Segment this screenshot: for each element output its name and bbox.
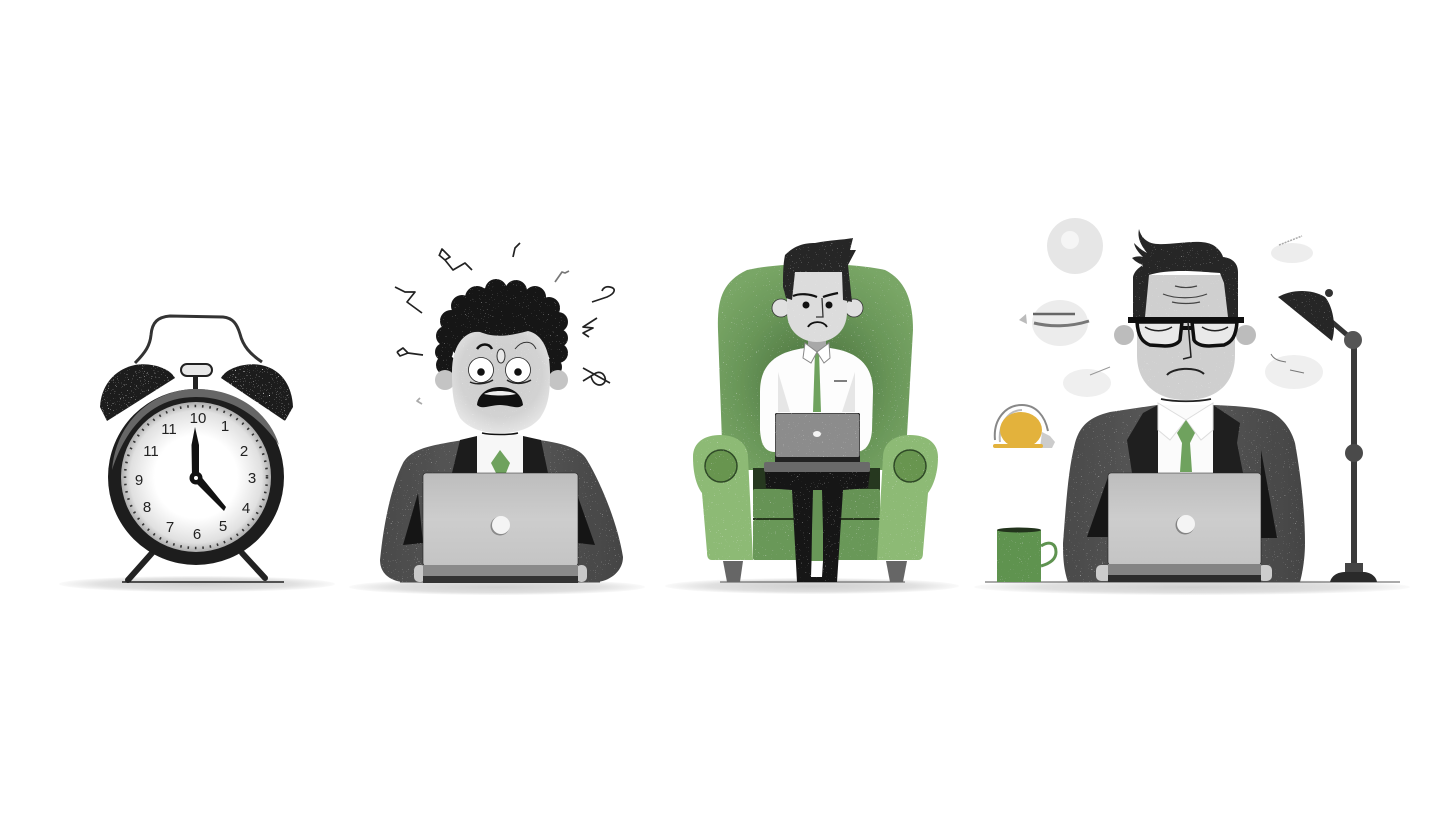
icon: gold coin [993, 405, 1055, 448]
hands [414, 565, 587, 582]
laptop [1108, 473, 1261, 582]
trousers [765, 472, 870, 582]
seat shadow [753, 468, 880, 492]
right bell [221, 364, 293, 421]
suit body [380, 438, 623, 582]
shirt shading [778, 372, 855, 412]
eyes and expression [468, 342, 536, 434]
clock handle [135, 316, 262, 363]
thought blob: lower left [1063, 367, 1111, 397]
thought: plate [1047, 218, 1103, 274]
shirt [760, 348, 873, 452]
seat cushions [753, 489, 880, 560]
chair legs [723, 561, 907, 582]
clock numbers: 10 [190, 410, 206, 427]
neck shadow [1161, 399, 1211, 401]
gap between legs [812, 490, 823, 530]
minute ticks [125, 406, 267, 548]
closed eyes [1145, 327, 1228, 331]
left bell [100, 364, 175, 421]
face [452, 331, 550, 433]
arm shadows [1087, 450, 1277, 538]
icon: mug [997, 528, 1056, 582]
chair arm right [877, 435, 938, 560]
shirt [1158, 405, 1213, 473]
clock numbers [135, 410, 256, 543]
clock numbers: 1 [221, 418, 229, 435]
icon: desk lamp [1278, 289, 1377, 582]
panel: alarm clock [59, 316, 335, 592]
shirt collar [477, 433, 523, 473]
laptop [775, 413, 860, 458]
wrinkles [1163, 286, 1207, 304]
panel: exhausted worker at desk [974, 218, 1410, 595]
head [787, 272, 847, 342]
stress squiggles [395, 243, 614, 404]
ground shadow [665, 578, 959, 594]
hair [783, 238, 856, 302]
panel: worker in armchair [665, 238, 959, 594]
lap table [764, 457, 870, 472]
bell hammer knob [181, 364, 212, 389]
collar [1158, 403, 1213, 440]
ground shadow [349, 579, 645, 595]
ears [435, 370, 568, 390]
collar [803, 343, 830, 363]
tie [813, 352, 821, 412]
head [1137, 275, 1235, 400]
ground shadow: clock [59, 576, 335, 592]
clock numbers: 5 [219, 518, 227, 535]
clock numbers: 4 [242, 500, 250, 517]
clock numbers: 7 [166, 519, 174, 536]
clock body [108, 389, 284, 565]
chair back [718, 264, 913, 470]
clock feet [122, 553, 284, 582]
arm shadows [403, 493, 595, 545]
expression [793, 293, 838, 327]
neck [808, 338, 826, 352]
tie [491, 450, 510, 473]
clock numbers: 8 [143, 499, 151, 516]
glasses [1128, 317, 1244, 346]
thought blob: right [1265, 354, 1323, 389]
ground shadow [974, 579, 1410, 595]
curly hair [435, 279, 568, 376]
hair [1132, 229, 1238, 317]
clock face [121, 402, 271, 552]
ears [772, 299, 863, 317]
clock numbers: 2 [240, 443, 248, 460]
clock numbers: 11 [161, 421, 177, 438]
ears [1114, 325, 1256, 345]
suit body [1063, 405, 1305, 582]
clock numbers: 11 [143, 443, 159, 460]
panel: panicked worker [349, 243, 645, 595]
nose and mouth [1167, 322, 1204, 375]
clock numbers: 3 [248, 470, 256, 487]
lapels [1127, 405, 1243, 473]
thought: burger [1019, 300, 1089, 346]
thought blob: upper right [1271, 236, 1313, 263]
pocket [834, 380, 847, 382]
laptop [423, 473, 578, 583]
hands [1096, 565, 1272, 581]
clock numbers: 9 [135, 472, 143, 489]
clock numbers: 6 [193, 526, 201, 543]
tie [1177, 420, 1195, 472]
clock hands [190, 427, 226, 511]
chair arm left [693, 435, 753, 560]
vest [452, 436, 548, 473]
